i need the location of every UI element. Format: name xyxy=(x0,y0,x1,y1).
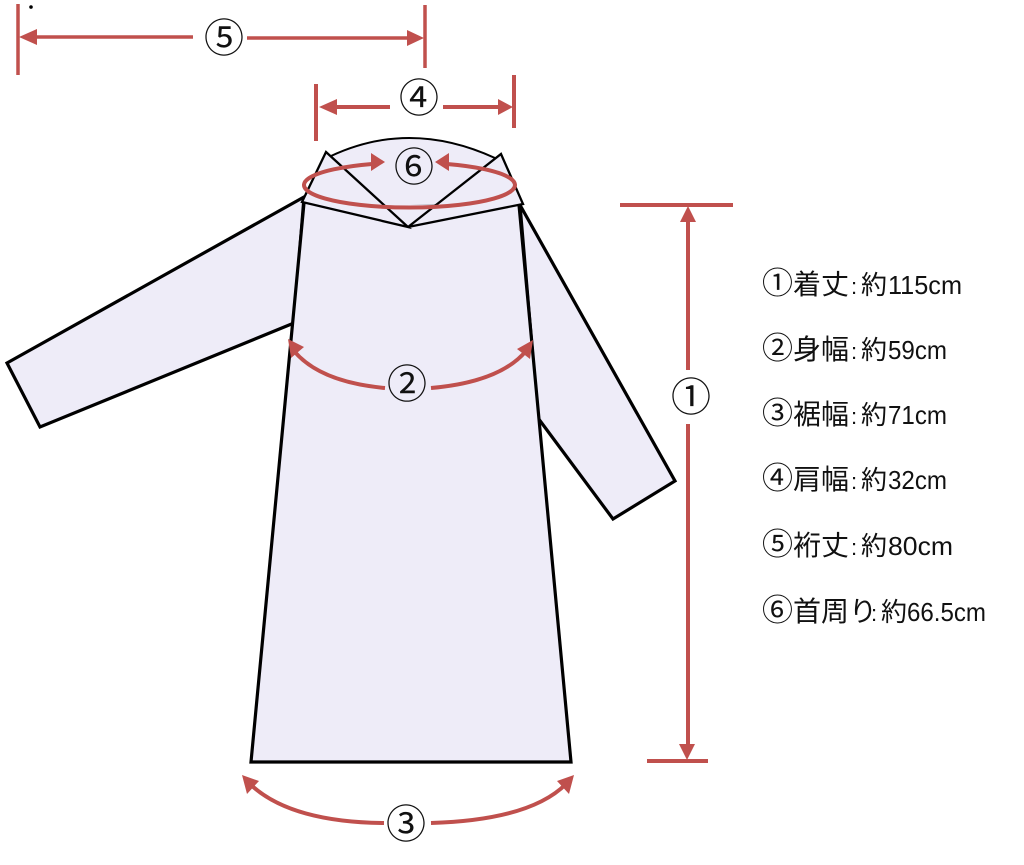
size 2: ② xyxy=(762,331,793,366)
size 5: 裄丈 xyxy=(793,530,849,561)
measure 4: shoulder width: ④ xyxy=(399,77,439,121)
size 4: ④ xyxy=(762,461,793,496)
measure 6: neck circumference xyxy=(304,146,515,208)
measure 1: total length: ① xyxy=(671,376,711,420)
speck xyxy=(29,5,33,9)
size 2: 身幅 xyxy=(793,334,849,365)
size 3: ③ xyxy=(762,396,793,431)
right sleeve xyxy=(520,205,675,519)
size 5: ⑤ xyxy=(762,527,793,562)
size 2: 約 xyxy=(861,335,887,365)
measure 4: shoulder width xyxy=(316,75,514,141)
size 4: 肩幅 xyxy=(793,464,849,495)
size 3: 71cm xyxy=(888,400,947,430)
measure 2: body width xyxy=(288,339,533,407)
size 1: ① xyxy=(762,266,793,301)
hood back xyxy=(330,138,498,205)
size 2: 59cm xyxy=(888,335,947,365)
right collar xyxy=(408,154,523,227)
measure 3: hem width xyxy=(242,775,574,847)
size list xyxy=(762,266,986,628)
measure 1: total length xyxy=(620,205,733,761)
size 5: 約 xyxy=(861,531,887,561)
size 5: : xyxy=(851,535,857,560)
size 1: : xyxy=(851,274,857,299)
garment diagram xyxy=(7,138,675,762)
measure 2: body width: ② xyxy=(387,363,427,407)
dress body xyxy=(251,203,571,762)
size 3: : xyxy=(851,404,857,429)
size 4: : xyxy=(851,469,857,494)
measure 5: sleeve length xyxy=(18,4,425,75)
size 1: 着丈 xyxy=(793,269,849,300)
size 4: 32cm xyxy=(888,465,947,495)
size 6: ⑥ xyxy=(762,593,793,628)
size 5: 80cm xyxy=(888,531,953,561)
size 6: 約 xyxy=(881,597,907,627)
size 4: 約 xyxy=(861,465,887,495)
size 6: 66.5cm xyxy=(907,597,986,627)
measure 6: neck circumference: ⑥ xyxy=(394,146,434,190)
size 3: 約 xyxy=(861,400,887,430)
size 1: 115cm xyxy=(888,270,962,300)
left sleeve xyxy=(7,197,304,427)
size 2: : xyxy=(851,339,857,364)
left collar xyxy=(302,152,408,227)
size 6: 首周り xyxy=(793,596,877,627)
size 1: 約 xyxy=(861,270,887,300)
size 3: 裾幅 xyxy=(793,399,849,430)
measure 3: hem width: ③ xyxy=(386,803,426,847)
size 6: : xyxy=(871,601,877,626)
measure 5: sleeve length: ⑤ xyxy=(204,17,244,61)
